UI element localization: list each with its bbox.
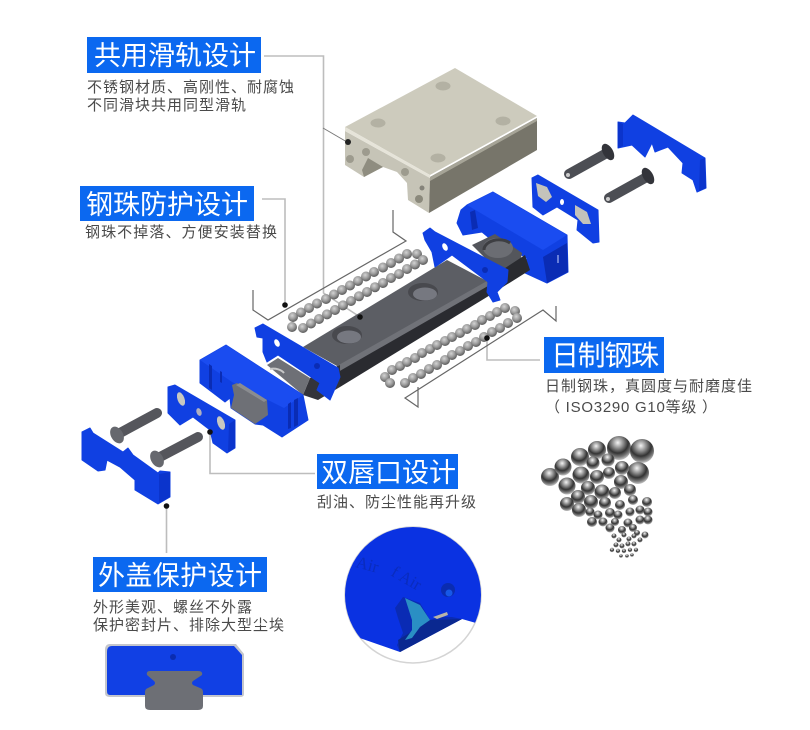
label: shared rail design bbox=[87, 37, 294, 114]
label: double lip design bbox=[317, 454, 476, 511]
label: ball protection design bbox=[80, 186, 277, 241]
right blue end block with carriage bbox=[457, 192, 568, 283]
label: shared rail design: 不锈钢材质、高刚性、耐腐蚀 bbox=[87, 78, 294, 96]
lower ball chain bbox=[380, 303, 522, 388]
right screw upper bbox=[566, 142, 617, 177]
left blue end block with carriage bbox=[200, 345, 310, 437]
leader dots bbox=[164, 302, 490, 509]
double lip detail circle bbox=[344, 526, 482, 664]
label: japanese steel balls: 日制钢珠，真圆度与耐磨度佳 bbox=[545, 377, 752, 395]
right retainer plate bbox=[532, 175, 599, 243]
double lip detail circle: Air bbox=[354, 553, 381, 577]
label: ball protection design: 钢珠防护设计 bbox=[86, 190, 248, 220]
lower wiper plate bbox=[255, 324, 340, 400]
label: japanese steel balls: （ ISO3290 G10等级 ） bbox=[545, 398, 717, 416]
leader line: shared rail bbox=[264, 56, 360, 317]
label: japanese steel balls bbox=[544, 337, 752, 416]
leader line: outer cover bbox=[166, 506, 168, 553]
linear rail bbox=[303, 255, 530, 387]
leader line: ball protection bbox=[262, 199, 285, 305]
label: outer cover protection: 外形美观、螺丝不外露 bbox=[93, 599, 252, 616]
leader line: block pointer bbox=[323, 128, 347, 142]
end-view cover with rail profile bbox=[105, 644, 244, 710]
leader line: steel balls bbox=[487, 338, 540, 360]
block: stainless top carriage bbox=[345, 68, 537, 213]
leader line: double lip bbox=[210, 432, 315, 474]
upper wiper plate bbox=[423, 228, 508, 302]
double lip detail circle: f Air bbox=[388, 562, 425, 594]
bracket: lower ball chain bbox=[405, 306, 556, 407]
steel ball pile bbox=[541, 436, 654, 558]
left outer cover bbox=[82, 428, 170, 504]
label: shared rail design: 共用滑轨设计 bbox=[94, 41, 256, 71]
label: shared rail design: 不同滑块共用同型滑轨 bbox=[87, 97, 246, 114]
left screw upper bbox=[107, 413, 157, 446]
label: japanese steel balls: 日制钢珠 bbox=[551, 340, 659, 371]
label: double lip design: 双唇口设计 bbox=[321, 458, 456, 488]
label: outer cover protection bbox=[93, 557, 284, 634]
left retainer plate bbox=[168, 385, 235, 453]
left screw lower bbox=[147, 437, 198, 470]
upper ball chain bbox=[287, 249, 428, 333]
right screw lower bbox=[606, 166, 657, 201]
label: outer cover protection: 外盖保护设计 bbox=[98, 561, 262, 591]
bracket: upper ball chain bbox=[253, 210, 406, 320]
right outer cover bbox=[618, 115, 706, 192]
label: ball protection design: 钢珠不掉落、方便安装替换 bbox=[85, 224, 277, 241]
label: double lip design: 刮油、防尘性能再升级 bbox=[317, 494, 476, 511]
label: outer cover protection: 保护密封片、排除大型尘埃 bbox=[93, 617, 284, 634]
